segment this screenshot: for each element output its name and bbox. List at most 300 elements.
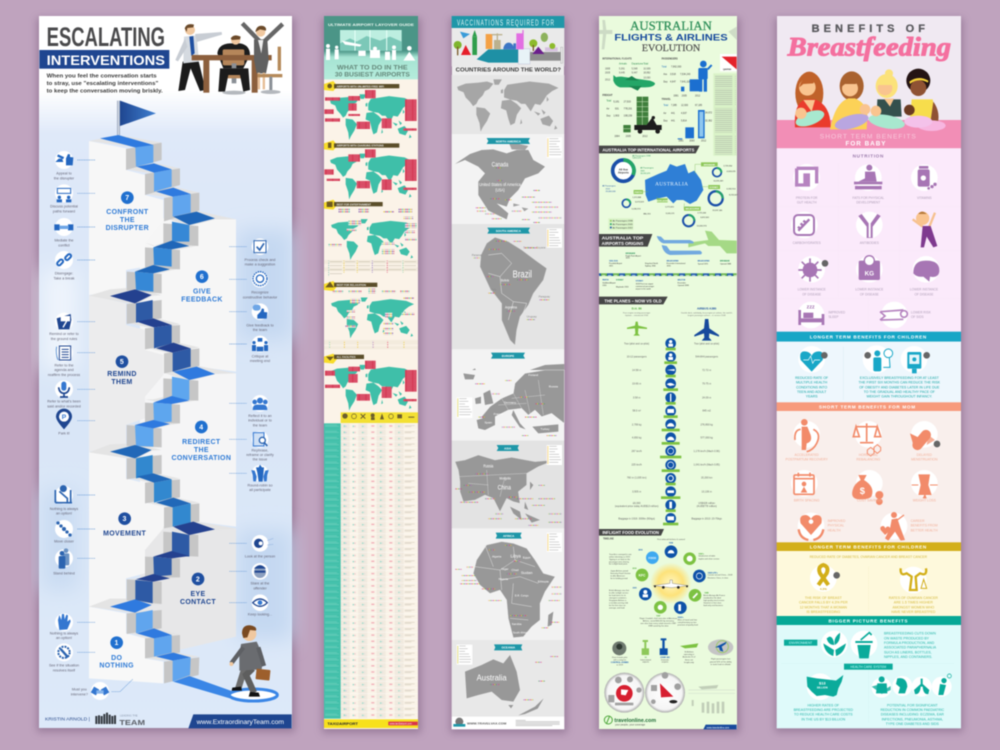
food timeline texts: Singapore Airlines is xyxy=(609,599,626,602)
food timeline texts: to offer in-flight service xyxy=(609,591,628,594)
stats row: these are xyxy=(685,658,694,661)
chart: total donut xyxy=(602,155,654,193)
text: ovarian cancer: ARE 1.5 TIMES HIGHER xyxy=(894,601,933,605)
icon: weight loss xyxy=(912,474,938,498)
mom labels: ACCELERATED xyxy=(794,453,819,457)
right labels: meeting end xyxy=(250,359,270,363)
icon: stand behind xyxy=(59,548,69,569)
table: travel: 1991 xyxy=(678,140,684,142)
footer band: www.travelonline.com xyxy=(707,726,729,729)
icon: sleeping bed xyxy=(798,304,824,325)
section: short term mom: BETTER HEALTH xyxy=(911,528,938,532)
footer: logos xyxy=(45,713,145,727)
food timeline texts: airline informing us 2013 xyxy=(609,555,630,558)
table: freight: 1,963 xyxy=(613,116,620,118)
comparison: new plane values: 845 m2 xyxy=(703,410,711,413)
step 1 label xyxy=(99,636,134,670)
grey risers xyxy=(126,143,199,683)
timeline labels above: Tyerwil 1970 xyxy=(698,263,708,265)
icon: raised hand xyxy=(58,614,71,630)
left labels: Mediate the xyxy=(54,238,74,242)
table: travel: 34,672 xyxy=(705,112,713,114)
right labels: make a suggestion xyxy=(245,263,275,267)
icon: appeal gavel and thumb xyxy=(55,154,73,165)
icon: microphone xyxy=(59,382,69,397)
table: freight: FREIGHT xyxy=(602,95,613,97)
icon: cargo stack xyxy=(623,97,648,132)
blue flight 1 top xyxy=(135,145,191,217)
title: escalating: ESCALATING xyxy=(47,22,165,52)
airport passenger figures: 3,073,509 xyxy=(635,202,645,204)
country names: United States of America xyxy=(479,182,521,188)
table: travel: 5,814 xyxy=(681,121,688,123)
icon: agenda xyxy=(56,346,71,360)
comparison: old plane values: Two (pilot and co-pilot) xyxy=(624,342,649,345)
step 7 label: CONFRONT xyxy=(106,209,149,216)
icon: hormonal balance xyxy=(853,423,881,456)
banner text: short term benefits for baby: SHORT TERM BENEFITS xyxy=(820,133,917,140)
airport tab names: ADELAIDE xyxy=(657,199,668,202)
table: travel: 12,930 xyxy=(681,105,689,107)
step 6 label: GIVE xyxy=(193,288,211,295)
right action icons xyxy=(243,238,278,617)
comparison: new plane values: 276,800 kg xyxy=(701,423,713,426)
text: reduced rate: TEEN AND ADULT xyxy=(797,390,827,394)
nutrition labels: OF DISEASE xyxy=(915,292,933,296)
icon: ribbon: 4.3% xyxy=(820,587,827,591)
comparison: old plane values: 10-12 passengers xyxy=(627,356,647,359)
right labels: reframe or clarify xyxy=(246,453,274,457)
mom labels: HORMONAL xyxy=(859,453,878,457)
country names: Bolivia xyxy=(501,279,509,283)
text: healthcare costs: TO REDUCE HEALTH CARE COSTS xyxy=(794,713,853,717)
table: passengers: Ara xyxy=(663,73,668,76)
country names: Turkey xyxy=(540,427,550,431)
legend: passenger years xyxy=(608,218,633,230)
table: freight: 5,181 xyxy=(613,101,620,103)
text: paediatric reduction: POTENTIAL FOR SIGNIFICANT xyxy=(887,703,938,707)
text: exclusively breastfeeding: TO THE GRADUAL AND HEALTHY PACE OF xyxy=(864,390,935,394)
plane comparison: a380: Double deck, widebody, four-engine jet airliner, the world's xyxy=(681,312,732,315)
stats row: with a wing for xyxy=(613,658,626,661)
icon: cargo truck xyxy=(634,116,662,134)
left labels: Nothing is always xyxy=(50,507,78,511)
logo: qantas xyxy=(720,54,737,71)
icon: rule book xyxy=(57,314,71,329)
stats row: 50 Airlines xyxy=(684,651,694,654)
food timeline texts: for food items for its xyxy=(609,594,626,597)
food timeline texts: 2000's xyxy=(678,617,683,619)
icon: ribbon xyxy=(810,565,840,592)
timeline labels above: Eagle Farm Airport xyxy=(626,254,641,257)
text: ovarian cancer xyxy=(889,596,938,614)
step 7 label: DISRUPTER xyxy=(106,225,149,232)
table header xyxy=(341,412,418,423)
footer: web address band: www.ExtraordinaryTeam.com xyxy=(196,719,284,726)
airport passenger figures: 6,692,601 xyxy=(700,217,709,219)
table: passengers: 4,647 xyxy=(670,81,677,83)
step 4 label xyxy=(171,421,231,462)
section: longer term cream xyxy=(777,551,961,616)
step 4 label: REDIRECT xyxy=(182,439,221,446)
chart: total donut: 26,000,000 xyxy=(606,191,616,193)
country names xyxy=(501,269,532,309)
icon: sleeping baby xyxy=(880,310,907,320)
banner text: short term benefits for baby xyxy=(820,133,917,148)
timeline labels below: Essendon xyxy=(678,282,686,284)
section: charging stations: AIRPORTS WITH CHARGING STATIONS xyxy=(337,145,384,148)
table: travel: Arr xyxy=(663,112,667,115)
step 1 label: DO xyxy=(111,655,122,662)
text: ovarian cancer: HAVE NEVER BREASTFED xyxy=(891,610,936,614)
table: freight: 2005 xyxy=(626,136,632,138)
step 5 label: THEM xyxy=(111,379,133,386)
timeline labels above: 1925 xyxy=(626,258,630,260)
icon: group xyxy=(252,398,268,410)
country names: Niger xyxy=(501,567,509,571)
banner: planes now vs old xyxy=(599,297,668,304)
footer band xyxy=(703,725,737,729)
section: best for relaxation xyxy=(324,281,377,291)
airport passenger figures: 5,036,374 xyxy=(632,208,641,210)
table: freight: 198,239 xyxy=(624,116,633,118)
staircase xyxy=(89,135,277,701)
chart: total donut: 18,392,079 xyxy=(640,173,651,175)
comparison: new plane values: 15,200 km xyxy=(701,477,712,480)
band: longer term gold: LONGER TERM BENEFITS FOR CHILDREN xyxy=(810,545,927,550)
country names: Ethiopia xyxy=(538,580,549,584)
illustration: walking man with briefcase xyxy=(229,625,271,697)
section: europe top xyxy=(452,349,564,383)
table: international flights: 5,548 xyxy=(632,68,638,70)
left labels: Appeal to xyxy=(56,171,72,175)
airport donuts xyxy=(622,168,723,226)
title xyxy=(787,23,951,62)
text: waste: ON WASTE PRODUCED BY xyxy=(884,636,930,640)
timeline labels below: 1920 xyxy=(602,285,606,287)
banner: top international airports: AUSTRALIA TOP INTERNATIONAL AIRPORTS xyxy=(602,147,695,153)
banner: top airports origins xyxy=(599,234,652,247)
plane comparison: a380: AIRBUS A380 xyxy=(697,307,717,311)
table: passengers: 7,534,243 xyxy=(680,74,691,76)
right labels: Stare at the xyxy=(251,582,269,586)
country names xyxy=(492,554,549,634)
text: reduced rate: REDUCED RATE OF xyxy=(795,376,828,380)
comparison: old plane values: 58.0 m² xyxy=(632,410,641,413)
step 6 label xyxy=(181,270,223,303)
band: bigger picture xyxy=(777,616,961,625)
title: FLIGHTS & AIRLINES xyxy=(614,33,728,43)
outside names: Paraguay xyxy=(539,294,551,298)
food timeline texts: to offer American xyxy=(610,575,625,578)
mom labels: WEIGHT LOSS xyxy=(913,498,937,502)
comparison: old plane values: 267 km/h xyxy=(632,450,642,453)
icon: sanitary pad xyxy=(910,428,940,452)
table airport names xyxy=(324,423,341,719)
panel: benefits of breastfeeding xyxy=(777,16,961,728)
food timeline texts: First onboard kitchens & canned xyxy=(657,538,685,541)
sun with plane xyxy=(650,563,691,604)
section: nutrition: LOWER RISK xyxy=(911,311,932,315)
icon: recycling bin xyxy=(851,631,877,658)
airport passenger figures: 14,034,974 xyxy=(697,226,707,228)
comparison: old plane values: 3.58 m xyxy=(633,397,640,400)
table: international flights: Departures xyxy=(632,62,644,65)
country names: Sudan xyxy=(521,570,532,575)
left labels: said and/or recorded xyxy=(47,404,81,408)
food timeline texts: Travellers surveyed in one xyxy=(609,553,631,556)
chart: total donut: All five xyxy=(619,167,628,171)
table: freight: Arr xyxy=(606,107,610,110)
text: exclusively breastfeeding: EXCLUSIVELY BREASTFEEDING FOR AT LEAST xyxy=(860,376,940,380)
banner: AFRICA xyxy=(503,534,515,538)
icon: sleeping bed: zzz xyxy=(807,304,815,310)
table: travel: 2012 xyxy=(701,140,707,142)
intro text: When you feel the conversation starts xyxy=(47,74,157,80)
text: paediatric reduction: REDUCTION IN COMMON PAEDIATRIC xyxy=(880,708,945,712)
icon: vitamin bottle xyxy=(918,166,937,190)
text: healthcare costs: IN THE US BY $13 BILLION xyxy=(801,717,846,721)
text: exclusively breastfeeding: OF OBESITY AND DIABETES LATER IN LIFE DUE xyxy=(859,385,940,389)
icon: weighing scale xyxy=(859,256,880,280)
intro text: to stray, use "escalating interventions" xyxy=(47,81,159,87)
table: international flights xyxy=(602,58,651,82)
food timeline texts: for its holiday period xyxy=(610,577,628,580)
footer: logos: LEADING THE xyxy=(120,714,138,718)
timeline labels above: 1920-1936 xyxy=(609,261,618,263)
country names: Russia xyxy=(483,463,494,468)
table: travel xyxy=(662,98,713,142)
country names: Mongolia xyxy=(499,476,511,480)
right labels: the team xyxy=(253,423,267,427)
table: passengers: 2012 xyxy=(695,95,701,97)
text: breast cancer: THE RISK OF BREAST xyxy=(805,596,843,600)
airport tab names: SYDNEY xyxy=(710,187,719,189)
icon: fats physical xyxy=(854,165,882,189)
table: freight: 27,533 xyxy=(624,101,631,103)
banner: EUROPE xyxy=(502,354,514,358)
text: paediatric reduction: DISEASES INCLUDING: ECZEMA, EAR xyxy=(881,713,944,717)
table: international flights: 2005 xyxy=(605,72,611,74)
heading: WHAT TO DO IN THE xyxy=(337,64,408,71)
food timeline texts: food only and business xyxy=(703,605,723,607)
comparison: old plane values: 225 km/h xyxy=(632,463,642,466)
food timeline texts: Business Class, in class xyxy=(708,577,728,579)
right labels: individual or to xyxy=(248,419,272,423)
right labels: Keep looking... xyxy=(248,613,272,617)
section: charging stations xyxy=(324,140,399,150)
text: ovarian cancer: AMONGST WOMEN WHO xyxy=(892,605,934,609)
chart: total donut: All Passengers xyxy=(602,185,616,188)
left labels: resolves itself xyxy=(53,668,76,672)
comparison: new plane values: US$428 million xyxy=(698,502,716,505)
banner: top international airports xyxy=(599,146,700,153)
timeline labels below: Opened 1988 xyxy=(678,285,689,287)
comparison: new plane values: 1,176 km/h (Mach 0.96) xyxy=(694,450,720,453)
country names: South Africa xyxy=(513,630,528,634)
step 4 label: THE xyxy=(194,447,209,454)
timeline labels below: SYDNEY xyxy=(636,281,644,283)
comparison: old plane values: 19.66 m xyxy=(632,383,641,386)
stats row: 12 xyxy=(645,657,648,659)
text: ovarian cancer: RATES OF OVARIAN CANCER xyxy=(889,596,938,600)
icon: passenger with luggage xyxy=(681,61,712,92)
icon: raised hands xyxy=(251,465,269,482)
history text column xyxy=(713,73,737,156)
text: reduced rate: MULTIPLE HEALTH xyxy=(796,381,828,385)
text: exclusively breastfeeding: THE FIRST SIX MONTHS CAN REDUCE THE RISK xyxy=(859,381,941,385)
timeline labels below xyxy=(602,280,689,291)
timeline labels above: 1935 xyxy=(667,266,671,268)
icon: us map xyxy=(807,673,843,700)
step 3 label xyxy=(103,512,147,538)
icon: feedback thumb xyxy=(253,305,267,319)
section: nutrition: OF SIDS xyxy=(911,315,924,319)
banner: SOUTH AMERICA xyxy=(496,229,522,233)
airport passenger figures: 1,272,000 xyxy=(665,206,675,208)
timeline labels above: BRISBANE xyxy=(720,260,730,263)
nutrition labels: CARBOHYDRATES xyxy=(793,241,821,245)
text: reduced rate xyxy=(795,376,828,399)
airport tab names xyxy=(635,163,719,211)
legend xyxy=(547,228,562,248)
banner: inflight food evolution: TIMELINE xyxy=(603,539,614,541)
map: entertainment xyxy=(328,208,417,260)
food timeline texts: strongest customers. xyxy=(609,596,627,599)
food timeline texts: 1960's/70's xyxy=(708,572,718,574)
section: all facilities xyxy=(324,354,364,364)
map: australia xyxy=(645,164,703,210)
stats row: Australia 15 of xyxy=(683,656,696,659)
icon: us map: $13 xyxy=(819,681,826,686)
section: short term mom xyxy=(777,411,961,542)
vaccine chips xyxy=(490,656,558,700)
text: paediatric reduction: TYPE ONE DIABETES AND SIDS xyxy=(886,722,940,726)
timeline labels below: airport in the world xyxy=(636,288,651,291)
plane comparison: a380: largest passenger airliner – in service 2008 xyxy=(688,314,726,317)
timeline labels below: Guildford Airport xyxy=(602,281,616,284)
food timeline circles: FOOD xyxy=(648,556,656,560)
banner: inflight food evolution: INFLIGHT FOOD EVOLUTION xyxy=(602,530,660,535)
plane comparison: dh86: D.H. 86 xyxy=(632,307,642,311)
country names: China xyxy=(498,484,511,491)
left labels: Stand behind xyxy=(53,571,75,575)
comparison: new plane values: 13,136 m xyxy=(701,490,712,493)
nutrition labels: PROTEIN FOR xyxy=(796,196,818,200)
stats row: airports xyxy=(662,661,668,664)
icon: broken chain xyxy=(56,253,72,266)
timeline labels above: MELBOURNE xyxy=(698,261,710,263)
panel: vaccinations xyxy=(452,16,564,729)
left labels: Move closer xyxy=(54,539,75,543)
airport tab names: BRISBANE xyxy=(704,163,716,166)
faint plane watermarks xyxy=(599,20,737,49)
airport passenger figures: 8,232,047 xyxy=(729,194,738,196)
table: passengers: 1991 xyxy=(673,95,679,97)
step 4 label: 4 xyxy=(199,424,203,431)
map: australia: AUSTRALIA xyxy=(655,181,688,187)
table: freight: 2012 xyxy=(642,136,648,138)
panel: airport layover guide xyxy=(324,16,418,729)
icon: us map: BILLION xyxy=(817,686,828,690)
section: short term mom: PHYSICAL xyxy=(828,524,844,528)
table: international flights: 13,000 xyxy=(643,77,651,79)
illustration: four mothers and babies xyxy=(794,69,946,133)
left labels: the disrupter xyxy=(54,176,75,180)
right labels: Round-robin so xyxy=(247,483,272,487)
stats row: freight-only xyxy=(684,661,694,664)
icon: money bag: $ xyxy=(860,486,866,496)
text: healthcare costs: HIGHER RATES OF xyxy=(807,703,839,707)
pink band xyxy=(777,120,961,148)
table: passengers: Total xyxy=(662,65,667,68)
outside names: Suriname, Guyana xyxy=(523,246,546,250)
food timeline texts: 1988 xyxy=(704,592,710,594)
heading xyxy=(335,64,410,78)
table: passengers: 7,962,000 xyxy=(671,66,682,68)
text: waste: ASSOCIATED PARAPHERNALIA xyxy=(884,646,937,650)
icon: handshake xyxy=(91,687,109,695)
text: reduced rate: CONDITIONS INTO xyxy=(796,385,828,389)
food timeline texts: for the first class on xyxy=(609,604,626,607)
comparison: old plane values: 760 m (1,035 km) xyxy=(627,477,647,480)
table: freight: 1994 xyxy=(614,136,620,138)
food timeline texts: 1989 saved by the olive xyxy=(648,625,668,628)
icon: mediate hands xyxy=(54,224,73,230)
left labels: Remind or refer to xyxy=(49,332,79,336)
text: waste: BREASTFEEDING CUTS DOWN xyxy=(884,632,936,636)
table: travel: Total xyxy=(663,104,669,107)
food timeline texts: provision of quality food xyxy=(678,624,698,627)
title: BENEFITS OF xyxy=(812,23,925,35)
heading: 30 BUSIEST AIRPORTS xyxy=(335,71,410,78)
icon: paediatric illnesses xyxy=(872,674,952,698)
country names: Chad xyxy=(511,568,519,572)
airport passenger figures: 2,725,000 xyxy=(697,212,707,214)
icon: discuss paths xyxy=(57,188,71,202)
comparison: new plane values: (AUD$778 million) xyxy=(697,505,717,508)
legend xyxy=(457,397,472,418)
chart: total donut: 2012 xyxy=(606,188,610,190)
title text: ULTIMATE AIRPORT LAYOVER GUIDE xyxy=(328,23,415,27)
country names: (USA) xyxy=(495,188,505,193)
food timeline texts: for in-flight food posts xyxy=(609,563,627,566)
text: paediatric reduction: INFECTIONS, PNEUMONIA, ASTHMA, xyxy=(882,717,943,721)
footer: taxi2airport: www.taxi2airport.com xyxy=(390,722,412,725)
step 7 label: THE xyxy=(120,217,135,224)
comparison: old plane values xyxy=(615,342,659,521)
icon: look at the person xyxy=(254,538,273,548)
step 1 label: NOTHING xyxy=(99,663,134,670)
icon: move closer dots xyxy=(56,521,72,537)
banner: OCEANIA xyxy=(501,646,516,650)
airport passenger figures: 10,695,309 xyxy=(713,181,724,183)
step 2 label: CONTACT xyxy=(180,599,216,606)
table: international flights: 1995 xyxy=(605,68,611,70)
right labels: Recognize xyxy=(251,291,269,295)
timeline labels below: PERTH xyxy=(602,280,609,282)
airport passenger figures: 1,372,868 xyxy=(632,197,642,199)
icon: brain xyxy=(913,261,939,282)
left labels: an option! xyxy=(56,636,72,640)
step 7 label xyxy=(106,191,149,232)
country names: France xyxy=(494,412,503,416)
outside names: Uruguay xyxy=(527,314,537,318)
table: freight: Total xyxy=(606,100,612,103)
left labels xyxy=(47,171,88,696)
airport passenger figures: 6,332,914 xyxy=(727,188,736,190)
nutrition labels xyxy=(793,196,938,296)
